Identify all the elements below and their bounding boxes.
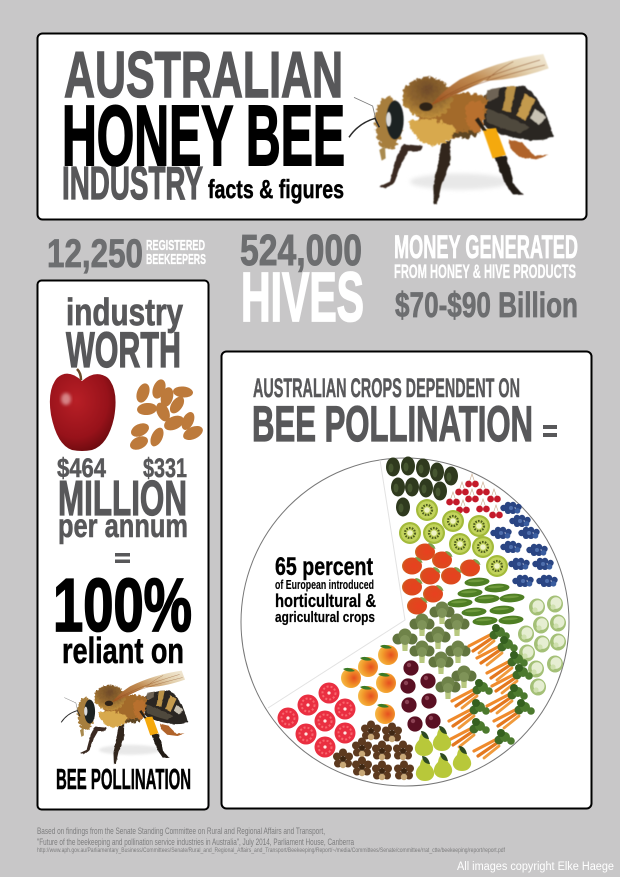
footer: source citation: Based on findings from the Senate Standing Committee on Rural and Regional Affairs and Transport, bbox=[37, 826, 325, 837]
crop: avocados bbox=[386, 456, 458, 516]
panel: title bbox=[38, 34, 586, 220]
crop: broccoli bbox=[392, 602, 476, 699]
crop: grapefruit bbox=[278, 682, 356, 758]
value: apple: $464 bbox=[57, 453, 106, 483]
pie label: 65 percent: agricultural crops bbox=[275, 609, 375, 626]
pie label: 65 percent: 65 percent bbox=[275, 553, 374, 581]
text: bee pollination: BEE POLLINATION bbox=[56, 764, 191, 796]
stat: money generated bbox=[394, 229, 578, 325]
icon: large bee bbox=[349, 54, 553, 205]
stat: registered beekeepers: BEEKEEPERS bbox=[146, 251, 206, 268]
stat: hives: HIVES bbox=[241, 258, 364, 336]
crop: carrots bbox=[449, 624, 535, 758]
heading: Honey Bee: HONEY BEE bbox=[62, 89, 345, 184]
crop: cauliflower bbox=[518, 596, 566, 696]
text: per annum: per annum bbox=[58, 507, 188, 544]
stat: hives: 524,000 bbox=[240, 226, 362, 275]
heading: industry: industry bbox=[66, 292, 183, 334]
footer: source citation: "Future of the beekeeping and pollination service industries in Australia", July 2014, Parliament House, Canberra bbox=[37, 837, 354, 848]
panel: industry worth bbox=[38, 280, 208, 810]
footer: copyright: All images copyright Elke Haege bbox=[457, 861, 614, 873]
icon: apple bbox=[50, 369, 116, 451]
text: million: MILLION bbox=[58, 472, 187, 526]
crop: peaches bbox=[341, 645, 398, 724]
crop: plums bbox=[400, 660, 441, 732]
heading: Industry: INDUSTRY bbox=[62, 157, 203, 209]
equals sign bbox=[115, 553, 130, 563]
icon: almonds bbox=[128, 378, 205, 452]
stat: hives bbox=[240, 226, 364, 336]
text: 100 percent: 100% bbox=[53, 563, 192, 647]
icon: small bee bbox=[61, 671, 188, 764]
pie label: 65 percent bbox=[275, 553, 376, 626]
value: almonds: $331 bbox=[143, 453, 187, 483]
pie chart bbox=[241, 456, 569, 786]
heading: worth: WORTH bbox=[66, 322, 181, 378]
heading: Australian: AUSTRALIAN bbox=[64, 38, 343, 111]
pie label: 65 percent: horticultural & bbox=[275, 591, 376, 611]
crop: cucumbers bbox=[447, 577, 525, 626]
panel: crops bbox=[222, 352, 592, 808]
footer: source citation bbox=[37, 826, 505, 854]
stat: registered beekeepers: 12,250 bbox=[47, 232, 143, 276]
crop: tomatoes bbox=[402, 543, 480, 614]
crop: blueberries bbox=[490, 502, 558, 587]
text: reliant on: reliant on bbox=[62, 630, 184, 671]
crop: kiwi fruit bbox=[399, 499, 508, 577]
subheading: facts and figures: facts & figures bbox=[208, 174, 344, 204]
crop: macadamias bbox=[333, 720, 414, 780]
equals sign bbox=[543, 425, 557, 437]
crop: cherries bbox=[446, 474, 503, 518]
pie label: 65 percent: of European introduced bbox=[275, 577, 374, 592]
stat: registered beekeepers: REGISTERED bbox=[146, 237, 205, 254]
crop: pears bbox=[415, 726, 471, 781]
